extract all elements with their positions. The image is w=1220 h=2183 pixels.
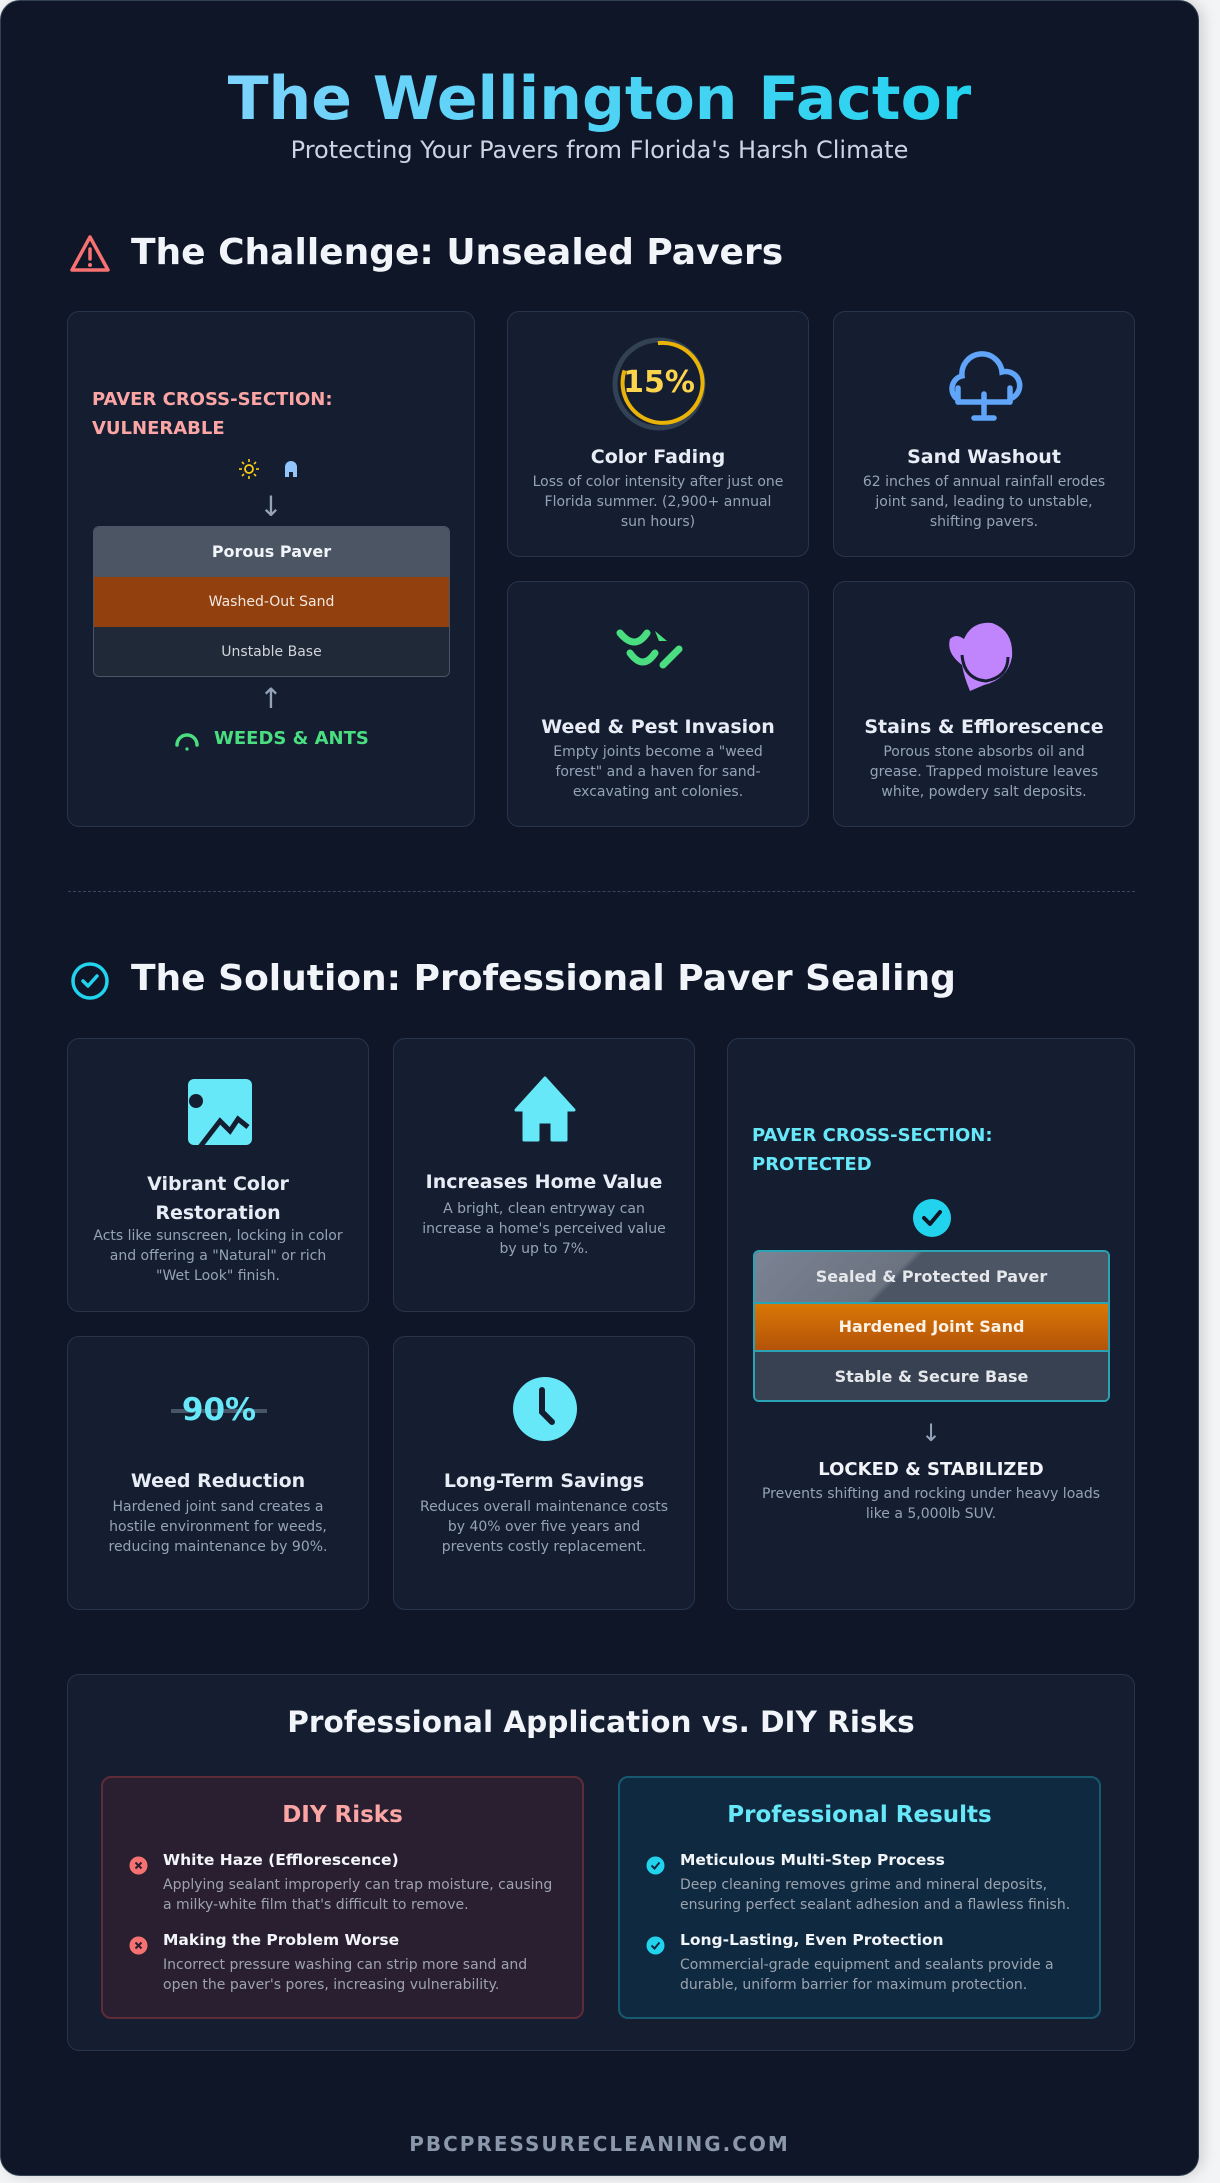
card: home value bbox=[393, 1038, 695, 1312]
subtitle: Protecting Your Pavers from Florida's Harsh Climate bbox=[291, 136, 908, 164]
box: professional results: Professional Results bbox=[727, 1802, 992, 1828]
layer stack bbox=[753, 1250, 1110, 1402]
icon: cloud rain bbox=[949, 351, 1022, 421]
box: DIY risks: DIY Risks bbox=[282, 1802, 403, 1828]
locked & stabilized: Prevents shifting and rocking under heavy loads like a 5,000lb SUV. bbox=[762, 1486, 1100, 1522]
icons: sun and rain bbox=[239, 459, 297, 479]
icon: check circle bbox=[71, 962, 109, 1000]
label vulnerable bbox=[92, 389, 333, 439]
card: sand washout: Sand Washout bbox=[907, 446, 1061, 468]
item: white haze: Applying sealant improperly can trap moisture, causing a milky-white film that's difficult to remove. bbox=[163, 1877, 552, 1913]
item: multi-step bbox=[646, 1851, 1070, 1913]
panel: professional vs DIY bbox=[67, 1674, 1135, 2051]
card: weed reduction: Weed Reduction bbox=[131, 1470, 305, 1492]
label vulnerable: VULNERABLE bbox=[92, 418, 225, 439]
item: long-lasting: Commercial-grade equipment and sealants provide a durable, uniform barrier for maximum protection. bbox=[680, 1957, 1054, 1993]
layer stack: Porous Paver bbox=[212, 542, 331, 561]
card: sand washout bbox=[833, 311, 1135, 557]
item: problem worse bbox=[130, 1931, 527, 1993]
icon: image bbox=[188, 1079, 252, 1145]
locked & stabilized bbox=[762, 1459, 1100, 1522]
card: long-term savings: Long-Term Savings bbox=[444, 1470, 644, 1492]
label vulnerable: PAVER CROSS-SECTION: bbox=[92, 389, 333, 410]
item: problem worse: Incorrect pressure washing can strip more sand and open the paver's pores, increasing vulnerability. bbox=[163, 1957, 527, 1993]
item: multi-step: Meticulous Multi-Step Process bbox=[680, 1851, 945, 1869]
card: long-term savings bbox=[393, 1336, 695, 1610]
layer stack bbox=[93, 526, 450, 677]
layer stack: Unstable Base bbox=[221, 644, 322, 660]
box: DIY risks bbox=[101, 1776, 584, 2019]
icon: weeds bbox=[616, 630, 682, 668]
card: sand washout: 62 inches of annual rainfall erodes joint sand, leading to unstable, shifting pavers. bbox=[863, 474, 1105, 530]
card: weed & pest: Empty joints become a "weed forest" and a haven for sand-excavating ant colonies. bbox=[553, 744, 763, 800]
heading: solution: The Solution: Professional Paver Sealing bbox=[131, 958, 956, 999]
icon: check bbox=[913, 1199, 951, 1237]
label protected: PROTECTED bbox=[752, 1154, 872, 1175]
panel: protected cross-section bbox=[727, 1038, 1135, 1610]
label protected: PAVER CROSS-SECTION: bbox=[752, 1125, 993, 1146]
card: weed & pest bbox=[507, 581, 809, 827]
comparison title: Professional Application vs. DIY Risks bbox=[287, 1705, 915, 1739]
item: multi-step: Deep cleaning removes grime and mineral deposits, ensuring perfect sealant adhesion and a flawless finish. bbox=[680, 1877, 1070, 1913]
icon: clock bbox=[513, 1377, 577, 1441]
item: long-lasting: Long-Lasting, Even Protection bbox=[680, 1931, 944, 1949]
card: vibrant color: Acts like sunscreen, locking in color and offering a "Natural" or rich "Wet Look" finish. bbox=[93, 1228, 343, 1284]
arrow up: ↑ bbox=[259, 682, 283, 715]
item: problem worse: Making the Problem Worse bbox=[163, 1931, 399, 1949]
layer stack: Sealed & Protected Paver bbox=[816, 1267, 1047, 1286]
card: weed & pest: Weed & Pest Invasion bbox=[541, 716, 775, 738]
arrow down: ↓ bbox=[259, 490, 283, 523]
icon: stain drop bbox=[949, 622, 1012, 691]
card: home value: A bright, clean entryway can increase a home's perceived value by up to 7%. bbox=[422, 1201, 666, 1257]
card: vibrant color: Restoration bbox=[155, 1202, 281, 1224]
item: white haze bbox=[130, 1851, 552, 1913]
card: stains: Stains & Efflorescence bbox=[864, 716, 1104, 738]
card: vibrant color bbox=[67, 1038, 369, 1312]
card: vibrant color: Vibrant Color bbox=[147, 1173, 289, 1195]
layer stack: Washed-Out Sand bbox=[209, 594, 334, 610]
icon: house bbox=[514, 1076, 576, 1142]
layer stack: Stable & Secure Base bbox=[835, 1367, 1028, 1386]
card: weed reduction: Hardened joint sand creates a hostile environment for weeds, reducing maintenance by 90%. bbox=[108, 1499, 327, 1555]
heading: challenge: The Challenge: Unsealed Pavers bbox=[131, 232, 783, 273]
card: weed reduction bbox=[67, 1336, 369, 1610]
footer: PBCPRESSURECLEANING.COM bbox=[409, 2132, 790, 2156]
card: color fading: Loss of color intensity after just one Florida summer. (2,900+ annual sun hours) bbox=[533, 474, 783, 530]
card: stains bbox=[833, 581, 1135, 827]
icon: warning bbox=[70, 235, 110, 272]
card: long-term savings: Reduces overall maintenance costs by 40% over five years and prevents costly replacement. bbox=[420, 1499, 668, 1555]
card: color fading bbox=[507, 311, 809, 557]
title: The Wellington Factor bbox=[228, 64, 971, 134]
locked & stabilized: LOCKED & STABILIZED bbox=[818, 1459, 1044, 1480]
weeds & ants label: WEEDS & ANTS bbox=[214, 728, 369, 749]
arrow down: ↓ bbox=[921, 1419, 941, 1447]
card: color fading: Color Fading bbox=[591, 446, 725, 468]
icon: 15% ring: 15% bbox=[623, 365, 695, 400]
panel: vulnerable cross-section bbox=[67, 311, 475, 827]
item: white haze: White Haze (Efflorescence) bbox=[163, 1851, 399, 1869]
item: long-lasting bbox=[646, 1931, 1054, 1993]
icon: 90%: 90% bbox=[182, 1392, 256, 1428]
layer stack: Hardened Joint Sand bbox=[839, 1317, 1024, 1336]
card: home value: Increases Home Value bbox=[426, 1171, 662, 1193]
icon: 15% ring bbox=[612, 338, 706, 430]
label protected bbox=[752, 1125, 993, 1175]
box: professional results bbox=[618, 1776, 1101, 2019]
card: stains: Porous stone absorbs oil and grease. Trapped moisture leaves white, powdery salt deposits. bbox=[870, 744, 1098, 800]
